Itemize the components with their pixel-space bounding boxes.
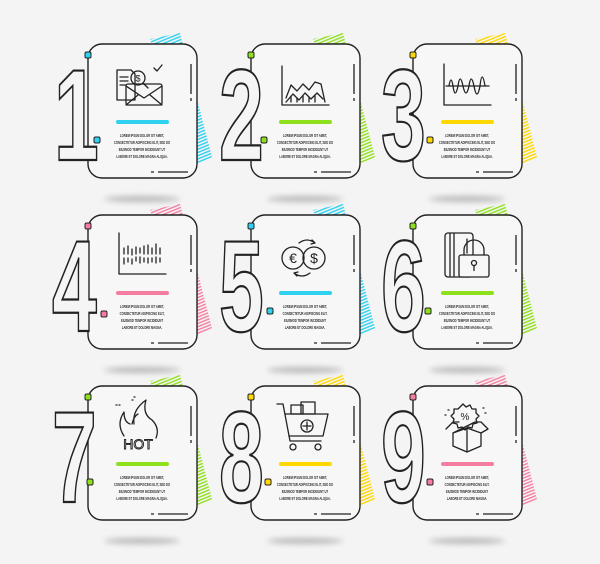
card 4: 4	[52, 213, 97, 359]
text block: LOREM IPSUM DOLOR SIT AMET,	[120, 304, 164, 309]
card 8	[219, 375, 375, 544]
text block: LABORE ET DOLORE MAGNA ALIQUA.	[441, 325, 493, 330]
text block: LABORE ET DOLORE MAGNA.	[285, 325, 325, 330]
text block	[114, 133, 170, 159]
card 3	[381, 33, 537, 202]
text block	[439, 304, 495, 330]
card 6: 6	[381, 213, 426, 359]
text block	[277, 133, 333, 159]
text block: EIUSMOD TEMPOR INCIDIDUNT	[121, 318, 164, 323]
icon: documents with envelope	[117, 65, 162, 105]
text block: LABORE ET DOLORE MAGNA ALIQUA.	[441, 154, 493, 159]
icon: bar chart	[119, 233, 166, 274]
card 2: 2	[219, 42, 264, 188]
text block: LOREM IPSUM DOLOR SIT AMET,	[283, 133, 327, 138]
card 8: 8	[219, 384, 264, 530]
text block: EIUSMOD TEMPOR INCIDIDUNT	[284, 318, 327, 323]
card 7: HOT	[123, 436, 153, 452]
text block: LOREM IPSUM DOLOR SIT AMET,	[445, 304, 489, 309]
text block: CONSECTETUR ADIPISCING ELIT, SED DO	[277, 482, 333, 487]
text block: CONSECTETUR ADIPISCING ELIT, SED DO	[439, 311, 495, 316]
card 1: $	[135, 74, 141, 84]
text block: LABORE ET DOLORE MAGNA ALIQUA.	[279, 154, 331, 159]
icon: area chart	[282, 66, 329, 105]
text block: CONSECTETUR ADIPISCING ELIT, SED DO	[439, 140, 495, 145]
text block	[283, 304, 327, 330]
text block: LOREM IPSUM DOLOR SIT AMET,	[120, 475, 164, 480]
icon: card with lock	[445, 233, 489, 277]
text block: LOREM IPSUM DOLOR SIT AMET,	[283, 475, 327, 480]
text block	[439, 133, 495, 159]
card 3: 3	[381, 42, 426, 188]
text block: CONSECTETUR ADIPISCING ELIT, SED DO	[114, 482, 170, 487]
text block: LABORE ET DOLORE MAGNA ALIQUA.	[116, 496, 168, 501]
text block: CONSECTETUR ADIPISCING ELIT, SED DO	[114, 140, 170, 145]
text block: CONSECTETUR ADIPISCING ELIT, SED DO	[277, 140, 333, 145]
text block: EIUSMOD TEMPOR INCIDIDUNT UT	[282, 489, 329, 494]
text block: LABORE ET DOLORE MAGNA.	[122, 325, 162, 330]
text block: LABORE ET DOLORE MAGNA.	[447, 496, 487, 501]
text block: EIUSMOD TEMPOR INCIDIDUNT UT	[444, 318, 491, 323]
card 5: €	[289, 250, 297, 266]
card 7	[52, 375, 212, 544]
card 5: 5	[219, 213, 264, 359]
text block: EIUSMOD TEMPOR INCIDIDUNT UT	[282, 147, 329, 152]
icon: euro dollar exchange	[282, 240, 325, 276]
text block: LOREM IPSUM DOLOR SIT AMET,	[445, 133, 489, 138]
text block: LOREM IPSUM DOLOR SIT AMET,	[120, 133, 164, 138]
text block: LABORE ET DOLORE MAGNA ALIQUA.	[116, 154, 168, 159]
icon: cart with plus	[277, 402, 328, 450]
text block: EIUSMOD TEMPOR INCIDIDUNT UT	[119, 147, 166, 152]
text block	[277, 475, 333, 501]
card 6	[381, 204, 537, 373]
text block: LOREM IPSUM DOLOR SIT AMET,	[445, 475, 489, 480]
card 1: 1	[54, 42, 99, 188]
text block: CONSECTETUR ADIPISCING ELIT.	[283, 311, 327, 316]
text block	[120, 304, 164, 330]
card 2	[219, 33, 375, 202]
card 9: %	[461, 412, 470, 423]
card 9	[381, 375, 537, 544]
icon: box with percent badge	[445, 404, 488, 452]
text block: EIUSMOD TEMPOR INCIDIDUNT	[446, 489, 489, 494]
card 5: $	[310, 250, 318, 266]
card 1	[54, 33, 212, 202]
card 5	[219, 204, 375, 373]
text block: LABORE ET DOLORE MAGNA ALIQUA.	[279, 496, 331, 501]
icon: line chart	[444, 64, 491, 105]
card 4	[52, 204, 212, 373]
card 9: 9	[381, 384, 426, 530]
text block	[445, 475, 489, 501]
text block	[114, 475, 170, 501]
card 7: 7	[52, 384, 97, 530]
text block: LOREM IPSUM DOLOR SIT AMET,	[283, 304, 327, 309]
text block: EIUSMOD TEMPOR INCIDIDUNT UT	[119, 489, 166, 494]
icon: hot flames	[116, 397, 157, 438]
text block: CONSECTETUR ADIPISCING ELIT.	[445, 482, 489, 487]
text block: EIUSMOD TEMPOR INCIDIDUNT UT	[444, 147, 491, 152]
text block: CONSECTETUR ADIPISCING ELIT,	[120, 311, 164, 316]
